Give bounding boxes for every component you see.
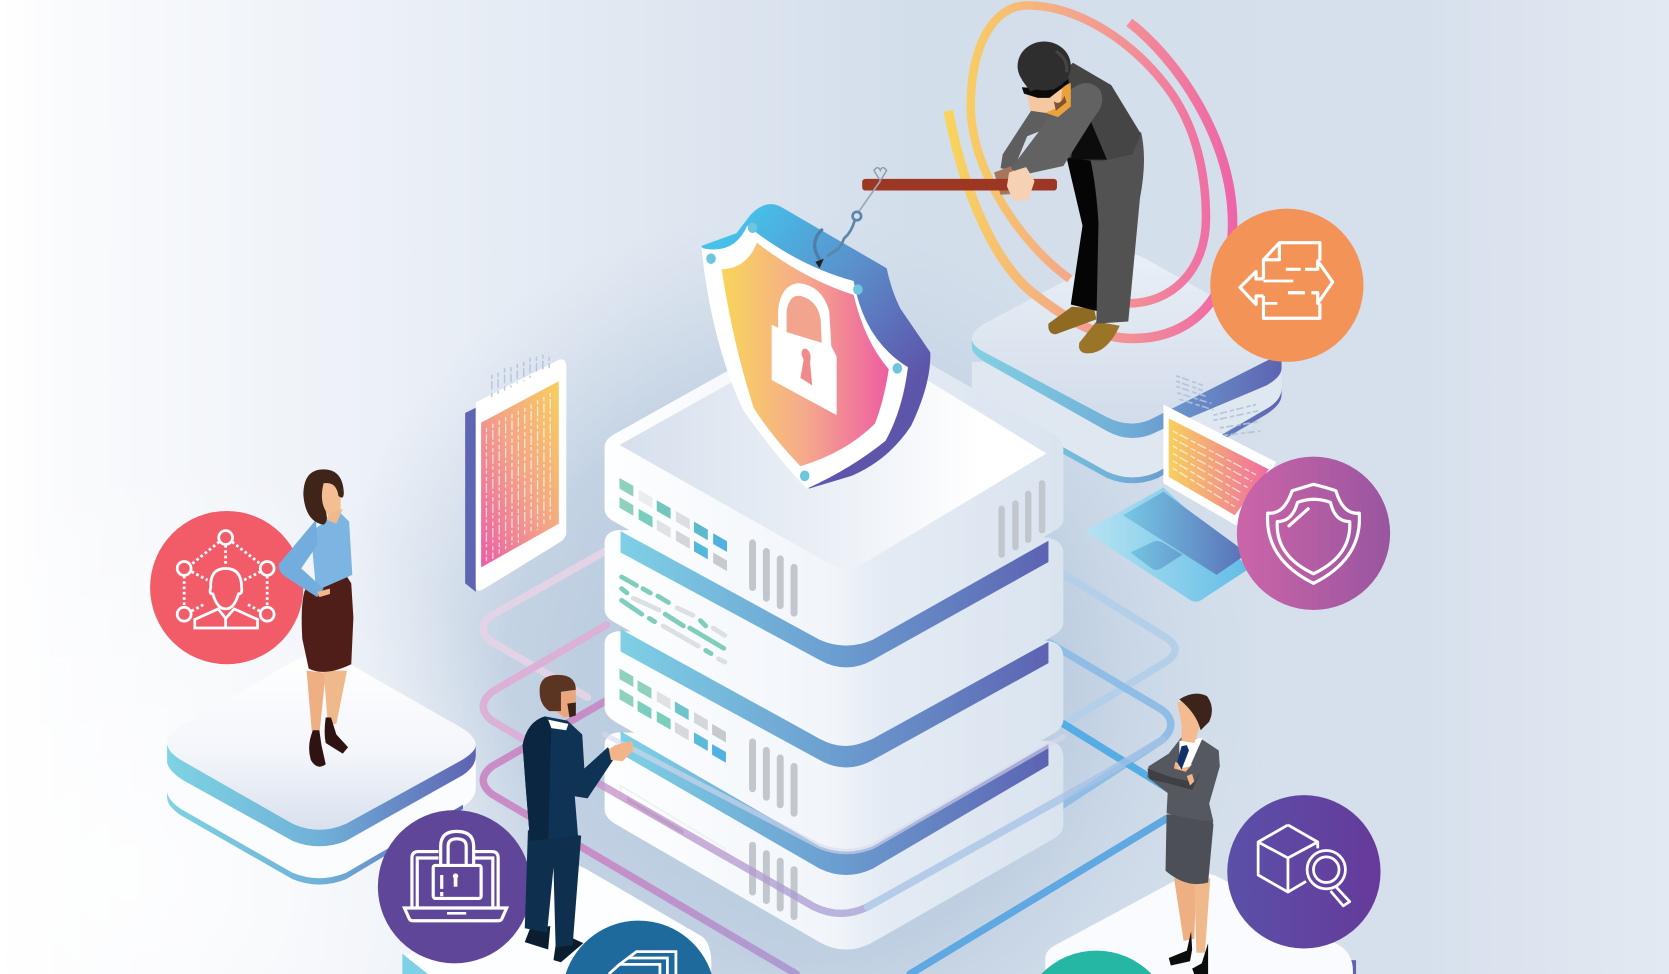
thief legs — [1067, 158, 1109, 311]
shield gradient — [722, 243, 889, 466]
icon badge: teal — [1041, 951, 1151, 974]
thief head and near hand — [1007, 42, 1071, 201]
tablet with code — [465, 354, 566, 592]
icon badge: network person — [150, 511, 303, 664]
platform: top right — [972, 253, 1282, 483]
code on laptop screen — [1173, 431, 1256, 507]
phishing line — [858, 168, 887, 213]
shield with padlock — [701, 204, 930, 489]
floating code above laptop — [1176, 376, 1260, 435]
code lines on tablet — [486, 393, 550, 561]
server unit 1 — [605, 316, 1063, 645]
data band 2 — [621, 629, 1048, 767]
thief — [994, 63, 1144, 353]
icon badge: laptop padlock — [378, 810, 531, 963]
data band 3 — [621, 731, 1048, 875]
icon badge: shield — [1237, 457, 1390, 610]
thief shoes — [1048, 307, 1096, 334]
server stack — [605, 316, 1063, 950]
connection wires left — [483, 550, 796, 974]
platform: bottom right — [1045, 873, 1356, 974]
server unit 3 — [605, 631, 1063, 847]
padlock — [772, 283, 837, 415]
data band 1 — [621, 531, 1048, 667]
platform: bottom centre — [402, 864, 711, 974]
server unit 2 — [605, 530, 1063, 746]
woman in grey suit — [1147, 694, 1220, 974]
platform: left — [167, 654, 476, 885]
shield front — [701, 226, 908, 489]
fishing rod — [862, 179, 1057, 191]
laptop with code — [1085, 376, 1276, 602]
man in navy suit — [523, 675, 633, 962]
floating code above tablet — [492, 354, 549, 397]
hook on shield — [815, 212, 861, 262]
thief jacket — [1047, 63, 1141, 162]
shield back — [701, 204, 930, 489]
translucent wires across server — [580, 734, 1162, 913]
laptop base — [1085, 488, 1250, 602]
woman in blue blouse — [279, 469, 353, 767]
connection wires right — [910, 575, 1175, 974]
icon badge: stacked documents — [566, 921, 712, 974]
thief rings — [948, 5, 1233, 339]
server unit 4 — [605, 732, 1063, 950]
rivets — [706, 222, 902, 481]
thief far hand — [994, 166, 1018, 195]
icon badge: document arrows — [1210, 209, 1364, 362]
icon badge: cube magnifier — [1227, 795, 1381, 948]
